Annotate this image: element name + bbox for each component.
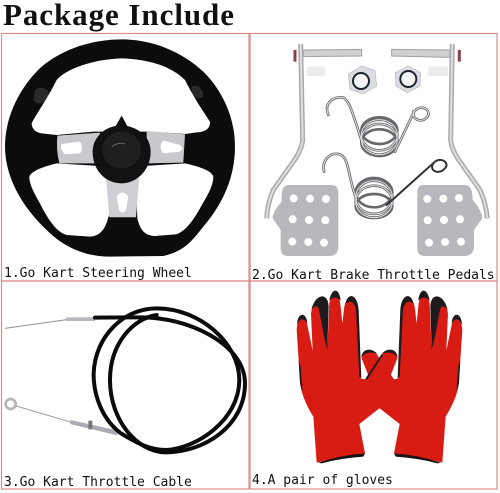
icon: gloves <box>297 291 462 463</box>
caption: 1.Go Kart Steering Wheel <box>4 266 192 281</box>
right glove <box>361 291 462 463</box>
panel: steering wheel <box>2 34 249 281</box>
panel: pedals <box>250 34 497 283</box>
icon: throttle cable <box>5 308 245 452</box>
panel: throttle cable <box>2 281 249 490</box>
icon: steering wheel <box>5 39 235 257</box>
caption: 3.Go Kart Throttle Cable <box>4 475 192 490</box>
caption: 2.Go Kart Brake Throttle Pedals <box>252 268 495 283</box>
left glove <box>297 291 398 463</box>
icon: pedals and springs <box>267 44 487 256</box>
caption: 4.A pair of gloves <box>252 473 393 488</box>
panel: gloves <box>250 281 497 489</box>
